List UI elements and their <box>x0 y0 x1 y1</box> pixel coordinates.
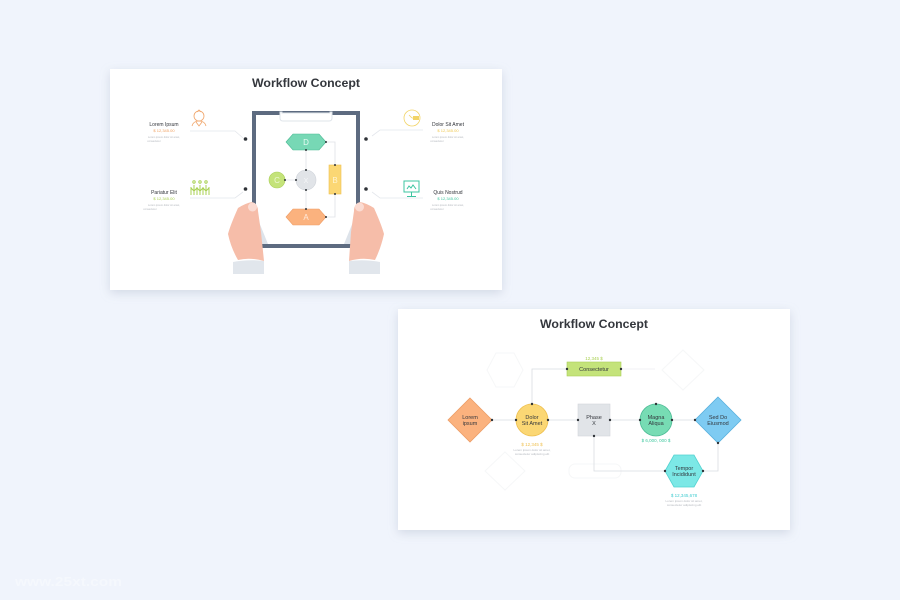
node: Sed Do Eiusmod diamond <box>695 397 741 443</box>
node: Lorem ipsum diamond: Lorem <box>462 415 478 421</box>
text block: yellow circle caption: consectetur adipiscing elit <box>515 452 549 456</box>
label: green rectangle value: 12,345 $ <box>585 356 603 361</box>
text block: Lorem Ipsum: consectetur <box>147 139 161 143</box>
circle X: X <box>304 178 309 185</box>
panel: process flow slide <box>398 309 790 530</box>
text block: Quis Nostrud: Quis Nostrud <box>433 190 463 196</box>
text block: Lorem Ipsum: Lorem Ipsum <box>149 122 179 128</box>
hexagon D: D <box>303 138 309 147</box>
clipboard clip <box>280 112 332 121</box>
text block: yellow circle caption <box>513 442 551 456</box>
node: Sed Do Eiusmod diamond: Eiusmod <box>707 421 729 427</box>
node: Consectetur rectangle: Consectetur <box>579 367 609 373</box>
text block: Dolor Sit Amet: consectetur <box>430 139 444 143</box>
text block: hexagon caption: Lorem ipsum dolor sit amet, <box>665 499 703 503</box>
node: Phase X square: Phase <box>586 415 602 421</box>
node: Tempor Incididunt hexagon <box>665 455 703 487</box>
circle C: C <box>274 176 280 185</box>
text block: yellow circle caption: $ 12,345 $ <box>521 442 543 447</box>
node: Magna Aliqua circle: Magna <box>648 415 665 421</box>
connector end dots <box>244 137 368 191</box>
text block: Pariatur: Pariatur Elit <box>151 190 178 196</box>
text block: hexagon caption <box>665 493 703 507</box>
node: Dolor Sit Amet circle: Dolor <box>525 415 539 421</box>
node: Phase X square <box>578 404 610 436</box>
node: Lorem ipsum diamond: ipsum <box>463 421 478 427</box>
text block: hexagon caption: consectetur adipiscing elit <box>667 503 701 507</box>
node: Magna Aliqua circle <box>640 404 672 436</box>
node: Dolor Sit Amet circle <box>516 404 548 436</box>
text block: Quis Nostrud: Lorem ipsum dolor sit amet, <box>432 203 464 207</box>
flowchart on clipboard <box>269 134 341 225</box>
rectangle B: B <box>332 176 338 185</box>
text block: Dolor Sit Amet <box>430 122 465 143</box>
text block: yellow circle caption: Lorem ipsum dolor sit amet, <box>513 448 551 452</box>
text block: hexagon caption: $ 12,345,678 <box>671 493 698 498</box>
heading: bottom slide title: Workflow Concept <box>540 317 648 331</box>
label: green circle value: $ 6,000, 000 $ <box>642 438 671 443</box>
left hand <box>228 202 268 274</box>
icon: monitor <box>404 181 419 196</box>
text block: Pariatur: Lorem ipsum dolor sit amet, <box>148 203 180 207</box>
text block: Pariatur: $ 12,345.00 <box>153 196 175 201</box>
text block: Quis Nostrud: consectetur <box>430 207 444 211</box>
text block: Lorem Ipsum <box>147 122 180 143</box>
flow connector lines <box>492 369 718 471</box>
faint background shapes <box>485 350 704 490</box>
node: Sed Do Eiusmod diamond: Sed Do <box>709 415 727 421</box>
icon: person <box>192 110 206 126</box>
watermark: www.25xt.com <box>14 574 122 589</box>
node: Dolor Sit Amet circle: Sit Amet <box>522 421 543 427</box>
heading: top slide title: Workflow Concept <box>252 76 360 90</box>
node: Phase X square: X <box>592 421 596 427</box>
node: Consectetur rectangle <box>567 362 621 376</box>
flowchart nodes <box>284 141 336 218</box>
text block: Dolor Sit Amet: $ 12,345.00 <box>437 128 459 133</box>
icon: people group <box>191 181 209 195</box>
connector lines to clipboard <box>190 130 423 198</box>
text block: Dolor Sit Amet: Dolor Sit Amet <box>432 122 465 128</box>
text block: Pariatur: consectetur <box>143 207 157 211</box>
text block: Quis Nostrud: $ 12,345.00 <box>437 196 459 201</box>
node: Magna Aliqua circle: Aliqua <box>648 421 665 427</box>
node: Tempor Incididunt hexagon: Incididunt <box>672 472 696 478</box>
text block: Lorem Ipsum: Lorem ipsum dolor sit amet, <box>148 135 180 139</box>
node: Lorem ipsum diamond <box>448 398 492 442</box>
text block: Quis Nostrud <box>430 190 464 211</box>
connector nodes <box>491 368 719 472</box>
node: Tempor Incididunt hexagon: Tempor <box>675 466 693 472</box>
hexagon A: A <box>303 213 309 222</box>
right hand <box>344 202 384 274</box>
text block: Pariatur <box>143 190 180 211</box>
clipboard <box>254 112 358 246</box>
text block: Lorem Ipsum: $ 12,345.00 <box>153 128 175 133</box>
panel: clipboard workflow slide <box>110 69 502 290</box>
icon: clock <box>404 110 420 126</box>
text block: Dolor Sit Amet: Lorem ipsum dolor sit amet, <box>432 135 464 139</box>
